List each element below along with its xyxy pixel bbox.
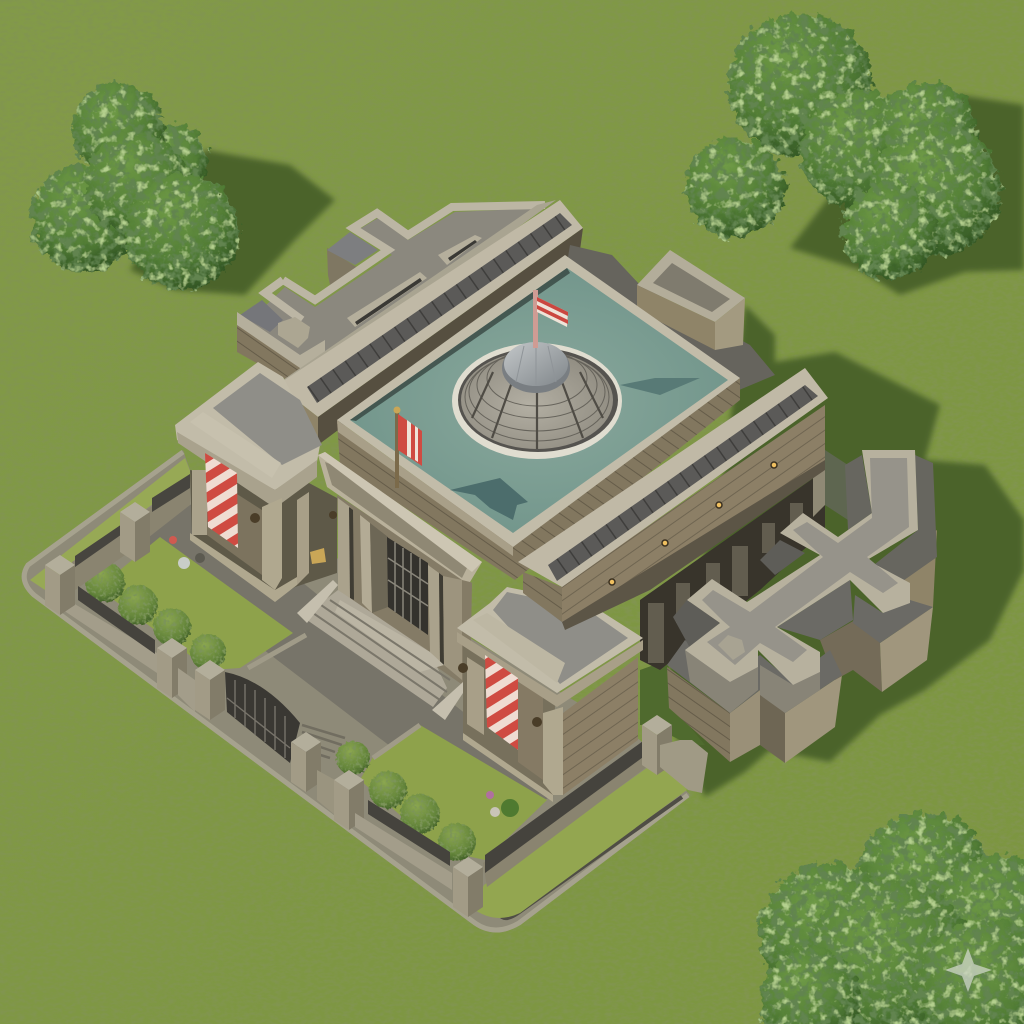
annexe cupola — [718, 635, 745, 660]
lawn: front right — [360, 725, 547, 860]
annexe roof parapet — [685, 450, 918, 685]
long slate roof — [277, 200, 583, 417]
front fence wall right — [291, 732, 483, 917]
back roof wing — [237, 200, 583, 445]
chimney — [278, 317, 310, 348]
left pavilion — [175, 362, 337, 602]
tree: top left — [31, 84, 240, 290]
annexe slate tiers — [667, 640, 842, 713]
side fence left — [72, 474, 190, 590]
teal roof — [350, 268, 728, 533]
flower beds — [169, 536, 519, 817]
wall lamps — [458, 663, 542, 727]
gate shadow on driveway — [298, 725, 345, 758]
lawn: side right — [472, 762, 687, 918]
watermark sparkle — [945, 948, 992, 992]
planters — [248, 635, 420, 758]
central roof block — [337, 255, 740, 580]
wall lamps — [250, 511, 337, 523]
lawn: front left — [100, 537, 293, 670]
wing lamps — [609, 462, 777, 585]
portico — [318, 452, 482, 690]
lawn: side left — [30, 458, 192, 590]
side fence right — [483, 715, 708, 887]
annexe roof floor — [702, 458, 909, 665]
roof slits — [347, 272, 427, 327]
front fence wall left — [45, 555, 225, 720]
roof flag — [533, 290, 568, 348]
tree: top right — [685, 13, 1001, 280]
gate door — [387, 537, 428, 635]
bushes: right — [336, 741, 476, 861]
tree and building shadows — [130, 95, 1024, 797]
compound base and curb — [23, 450, 690, 932]
rear right turret — [565, 245, 775, 398]
bushes: left — [85, 562, 226, 670]
bottom pavilion — [457, 587, 643, 802]
ridge band — [283, 200, 556, 385]
iron gate — [225, 672, 300, 763]
flag shadow on roof — [450, 478, 528, 520]
dome — [452, 342, 622, 459]
portico flag — [394, 406, 422, 488]
right banner — [485, 655, 518, 750]
right annexe — [667, 450, 937, 763]
annexe walls — [667, 667, 730, 762]
small slate roof — [240, 300, 283, 332]
colonnade behind right wing — [640, 425, 848, 670]
tree: bottom right — [758, 812, 1024, 1024]
right wing — [518, 368, 828, 630]
left banner — [205, 453, 238, 548]
shaded grass between pavilion and annexe — [640, 660, 705, 745]
steps — [297, 580, 463, 720]
